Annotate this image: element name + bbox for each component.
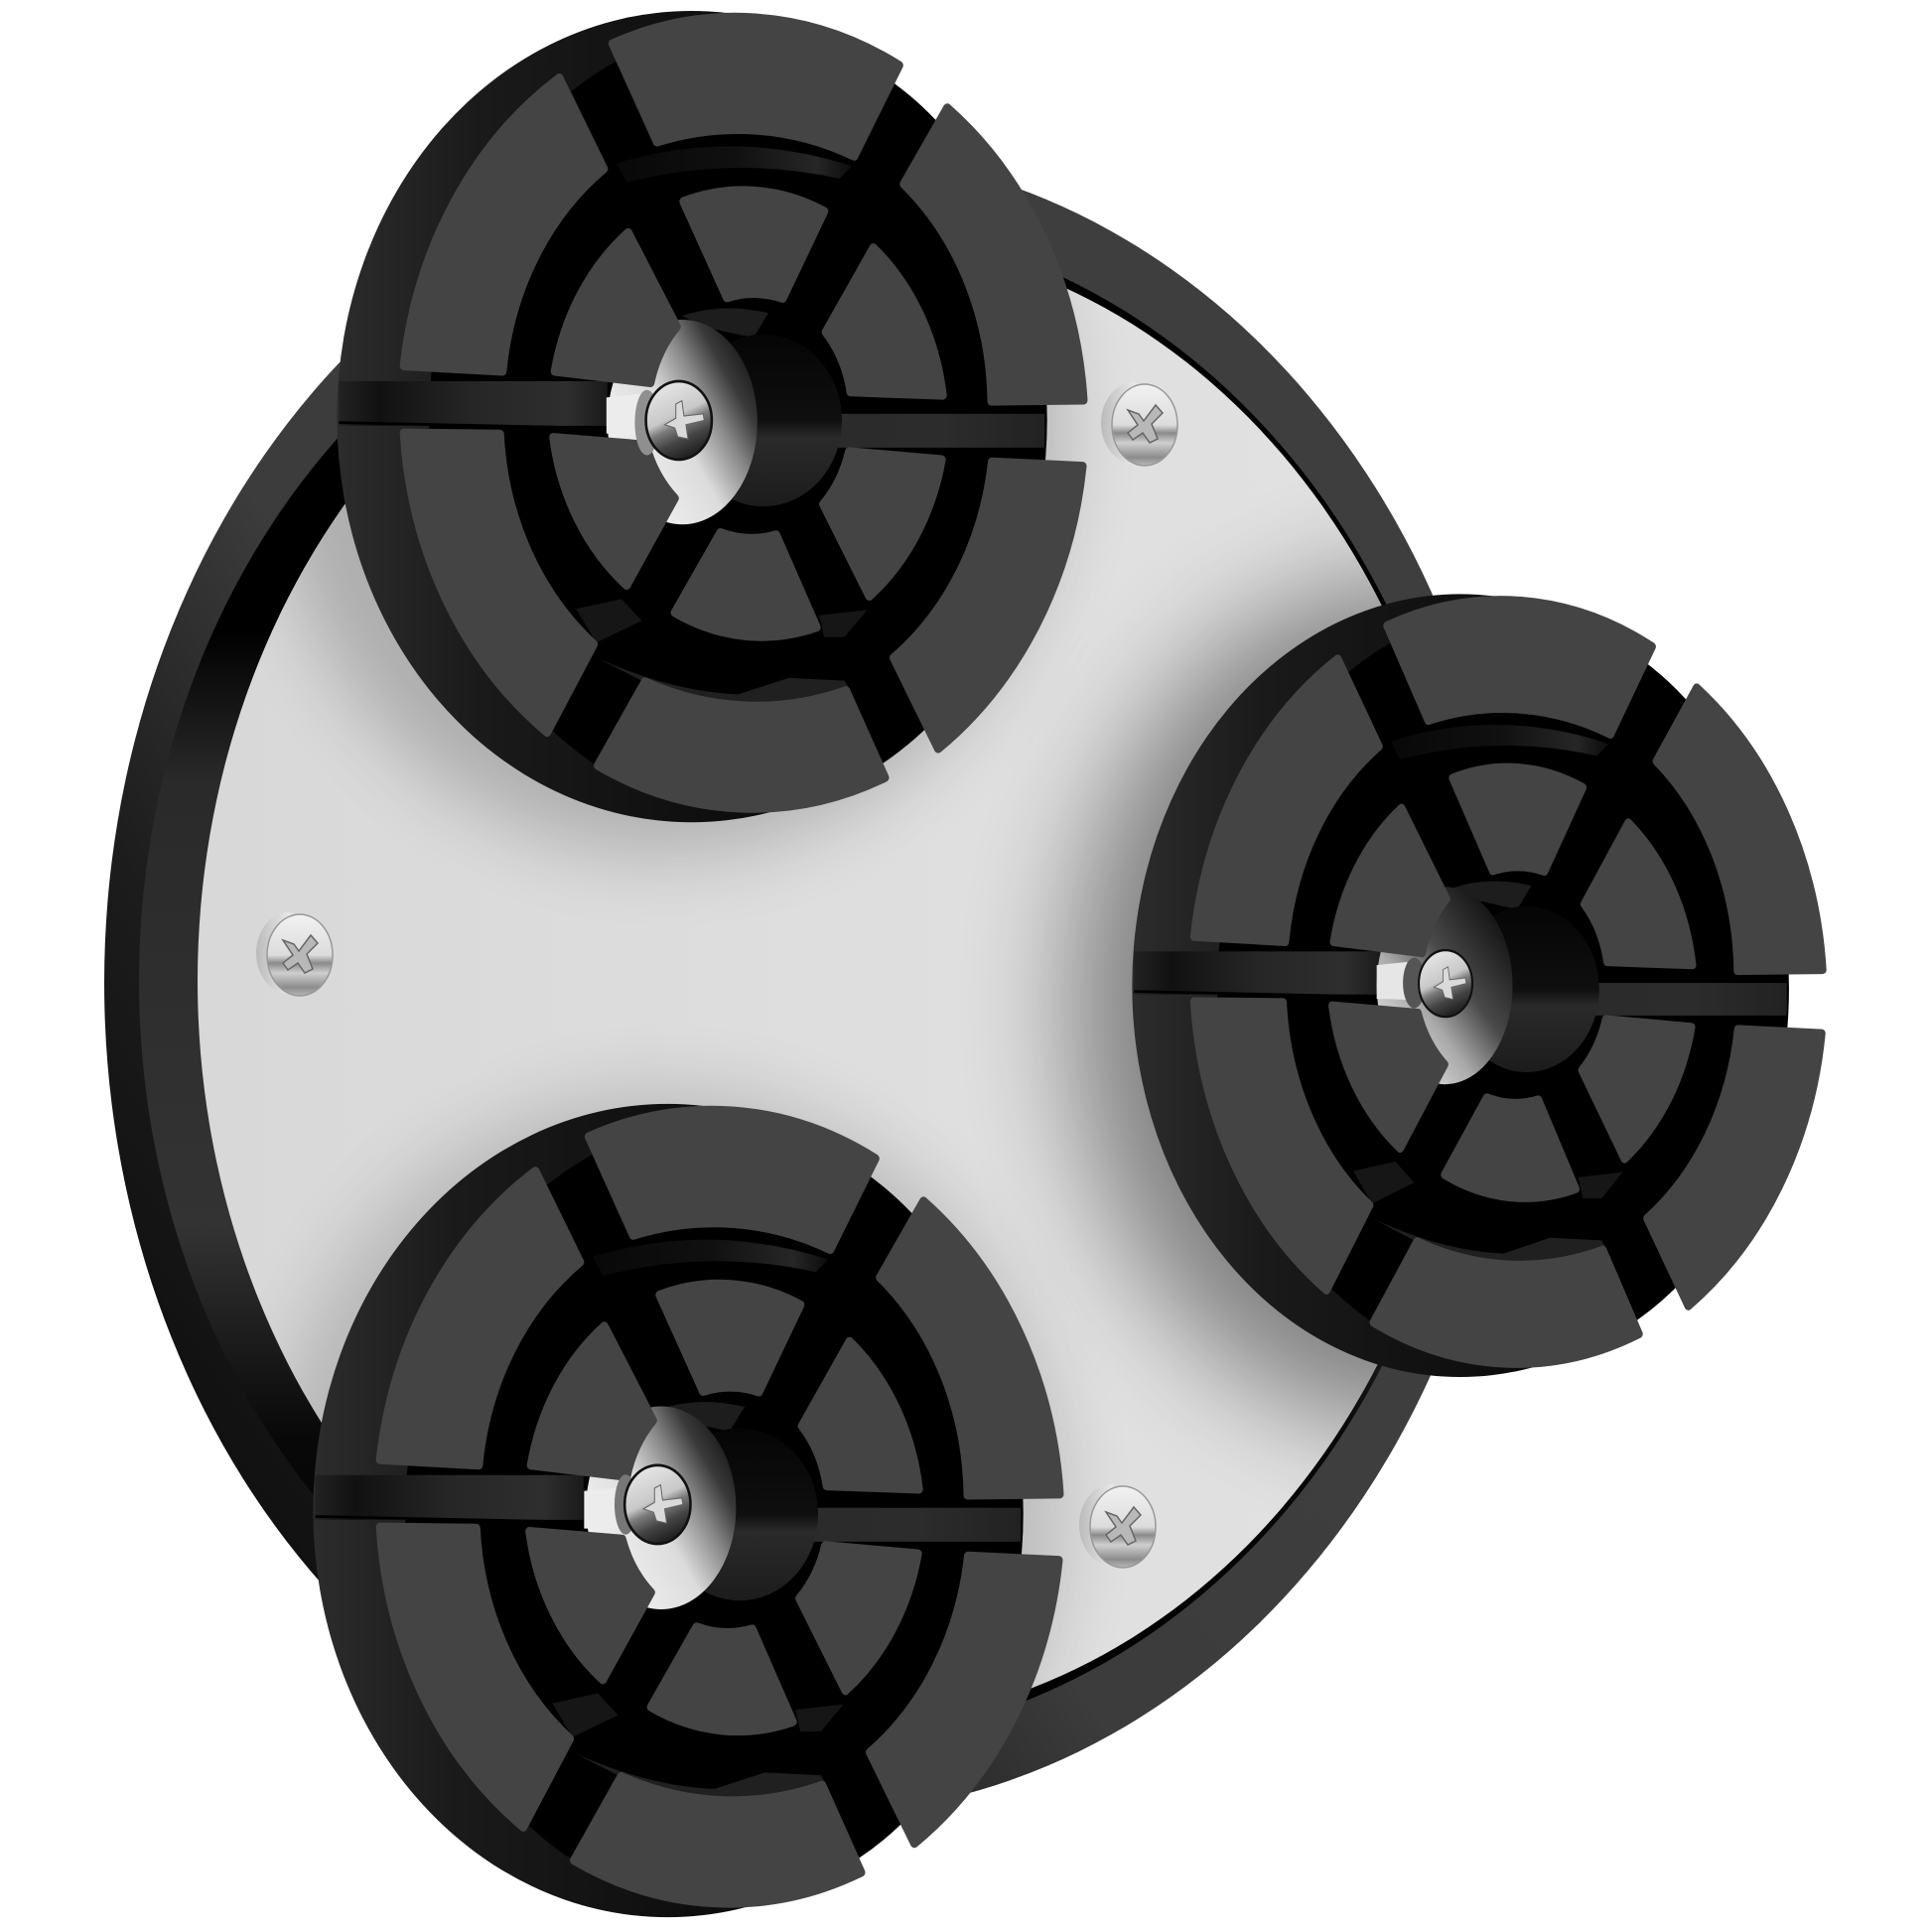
screw: upper right (1101, 382, 1177, 466)
screw: lower right (1079, 1484, 1156, 1568)
rubber pad: right (1132, 594, 1823, 1377)
screw shaft (1403, 958, 1426, 1008)
lit slot window (1377, 962, 1407, 1000)
lit slot window (584, 1487, 623, 1529)
centre screw (624, 1465, 690, 1544)
metal bowl (586, 1406, 736, 1609)
screw shaft (615, 1474, 636, 1535)
screw: left (256, 912, 333, 996)
outer rim (104, 151, 1514, 1815)
outer rubber segments (1194, 600, 1823, 1364)
rubber pad: bottom (313, 1104, 1059, 1917)
backing plate ring (104, 151, 1514, 1815)
screw shaft (634, 390, 659, 456)
metal bowl (608, 320, 758, 524)
lit slot window (607, 393, 647, 436)
outer rubber segments (380, 1110, 1059, 1903)
soft shadows on plate (268, 10, 1767, 1932)
rubber pad: top (337, 11, 1083, 822)
plate face (198, 236, 1468, 1725)
centre screw (646, 381, 712, 460)
centre screw (1419, 950, 1472, 1017)
inner rubber segments (553, 191, 943, 636)
outer rubber segments (404, 17, 1083, 808)
inner rubber segments (1332, 767, 1693, 1198)
dark inner band (139, 218, 1473, 1743)
metal bowl (1377, 887, 1513, 1084)
inner rubber segments (529, 1284, 919, 1731)
